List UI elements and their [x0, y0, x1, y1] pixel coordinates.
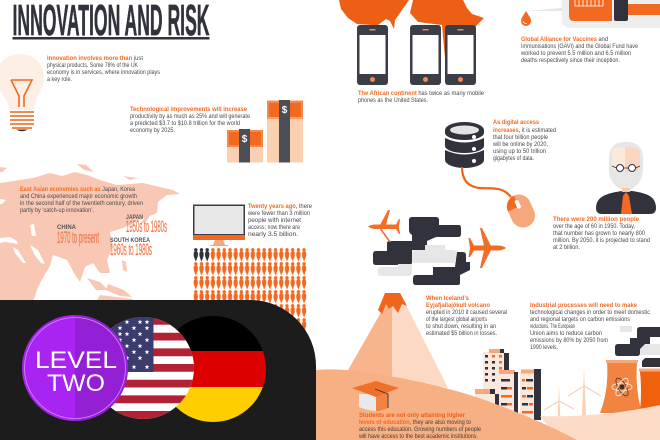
chart: money bars: $	[282, 105, 288, 116]
flag: usa	[110, 317, 194, 419]
text: 200 million people: that number has grown to nearly 800	[553, 230, 645, 237]
text: industrial processes: 1990 levels.	[530, 344, 558, 351]
text: volcano: estimated $5 billion in losses.	[426, 330, 497, 337]
text: innovation: Innovation involves more than just	[47, 55, 143, 62]
icon: wind turbine large	[568, 368, 601, 416]
icon: wind turbine small	[544, 385, 574, 422]
chart: money bars	[227, 100, 303, 162]
text: volcano	[426, 295, 507, 337]
text: students	[358, 412, 481, 440]
icon: drop	[521, 11, 531, 26]
text: digital access: gigabytes of data.	[493, 155, 534, 162]
label: china	[57, 224, 99, 247]
text: industrial processes	[530, 302, 651, 351]
text: innovation: economy is in services, where innovation plays	[47, 69, 161, 76]
text: twenty years ago: people with internet	[248, 217, 301, 224]
text: african continent: The African continent has twice as many mobile	[358, 90, 484, 97]
badge: level two: TWO	[47, 370, 105, 397]
text: digital access: As digital access	[493, 119, 539, 126]
panel: dark badge	[0, 300, 316, 440]
icon: graduation cap	[352, 381, 399, 411]
hill: main	[316, 369, 577, 440]
icon: clouds	[373, 217, 470, 285]
icon: cable and mouse	[462, 167, 539, 231]
text: 200 million people	[553, 216, 650, 251]
text: east asian economies: in the second half of the twentieth century, driven	[20, 200, 143, 207]
icon: phone 3	[445, 25, 476, 85]
text: innovation: physical products. Some 78% of the UK	[47, 62, 138, 69]
icon: older man	[596, 142, 656, 214]
chart: people grid	[193, 248, 307, 332]
icon: apartment buildings	[475, 349, 541, 420]
text: digital access: that four billion people	[493, 134, 548, 141]
infographic page: 1970 to present	[57, 229, 99, 247]
icon: cooling tower with atom	[600, 360, 642, 413]
text: digital access: will be online by 2020,	[492, 141, 548, 148]
text: gavi: deaths respectively since their inception.	[521, 57, 620, 64]
text: gavi: Immunisations (GAVI) and the Global Fund have	[521, 43, 638, 50]
text: east asian economies: East Asian economies such as Japan, Korea	[20, 186, 135, 193]
text: digital access	[492, 119, 556, 162]
label: china: CHINA	[57, 224, 77, 231]
text: innovation	[47, 55, 161, 83]
icon: cooling tower right	[639, 368, 660, 412]
text: gavi: Global Alliance for Vaccines and	[521, 36, 608, 43]
text: east asian economies: and China experienced major economic growth	[20, 193, 137, 200]
text: technological improvements: productivity by as much as 25% and will generate	[130, 113, 250, 120]
icon: light bulb	[0, 54, 44, 131]
text: digital access: increases, it is estimated	[493, 127, 556, 134]
icon: plane left	[368, 210, 400, 242]
text: technological improvements: a predicted $3.7 to $10.8 trillion for the world	[130, 120, 240, 127]
hill: pale right	[540, 405, 660, 440]
icon: syringe	[527, 0, 660, 28]
icon: database	[445, 122, 484, 168]
text: gavi	[520, 36, 638, 64]
text: technological improvements	[130, 106, 250, 134]
infographic page: 1960s to 1980s	[110, 241, 152, 259]
text: east asian economies: partly by ‘catch-up innovation’.	[20, 207, 94, 214]
text: twenty years ago: Twenty years ago, there	[248, 203, 312, 210]
text: 200 million people: over the age of 60 in 1950. Today,	[553, 223, 635, 230]
text: industrial processes: and regional targets on carbon emissions	[530, 316, 631, 323]
infographic page: 1950s to 1980s	[126, 218, 167, 236]
icon: volcano	[347, 293, 448, 388]
text: twenty years ago	[247, 203, 312, 238]
badge: level two	[22, 315, 128, 421]
text: volcano: of the largest global airports	[426, 316, 488, 323]
label: japan	[126, 214, 167, 236]
text: african continent: phones as the United States.	[358, 97, 428, 104]
text: industrial processes: emissions by 80% by 2050 from	[530, 337, 608, 344]
text: students: access this education. Growing numbers of people	[359, 426, 481, 433]
icon: plane right	[468, 228, 506, 268]
chart: money bars: $	[242, 134, 248, 145]
text: gavi: worked to prevent 5.5 million and 6.5 million	[520, 50, 631, 57]
text: twenty years ago: were fewer than 3 million	[247, 210, 310, 217]
map: east asia	[0, 164, 180, 302]
text: african continent	[358, 90, 484, 104]
label: south korea	[110, 237, 152, 259]
text: students: will have access to the best academic institutions.	[358, 433, 478, 440]
text: students: Students are not only attaining higher	[359, 412, 465, 419]
text: industrial processes: Industrial processes will need to make	[530, 302, 637, 309]
text: volcano: Eyjafjallajökull volcano	[426, 302, 490, 309]
icon: phone 1	[357, 25, 388, 85]
icon: clouds right	[615, 326, 660, 367]
text: 200 million people: There were 200 million people	[553, 216, 639, 223]
text: industrial processes: Union aims to reduce carbon	[530, 330, 602, 337]
text: students: levels of education, they are also moving to	[359, 419, 471, 426]
map: us and africa	[339, 0, 484, 58]
badge: level two: LEVEL	[35, 347, 117, 374]
text: east asian economies	[20, 186, 143, 214]
icon: phone 2	[410, 25, 441, 85]
text: technological improvements: economy by 2025.	[130, 127, 175, 134]
text: volcano: When Iceland’s	[426, 295, 469, 302]
text: volcano: erupted in 2010 it caused several	[426, 309, 507, 316]
text: volcano: to shut down, resulting in an	[426, 323, 496, 330]
text: digital access: using up to 50 trillion	[493, 148, 546, 155]
flag: germany	[176, 316, 266, 422]
text: twenty years ago: nearly 3.5 billion.	[248, 231, 298, 238]
text: 200 million people: at 2 billion.	[553, 244, 580, 251]
label: south korea: SOUTH KOREA	[110, 237, 150, 244]
icon: computer monitor	[193, 204, 245, 246]
text: innovation: a key role.	[47, 76, 72, 83]
text: twenty years ago: access; now there are	[248, 224, 300, 231]
text: technological improvements: Technological improvements will increase	[130, 106, 247, 113]
text: industrial processes: reductions. The European	[530, 323, 575, 330]
label: japan: JAPAN	[126, 214, 143, 221]
